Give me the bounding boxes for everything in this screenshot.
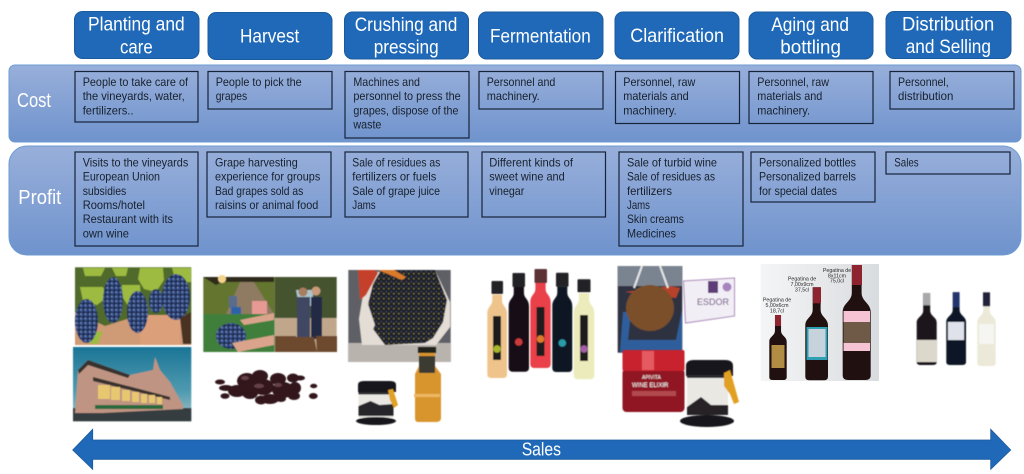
cost text: aging: materials and [757, 89, 822, 103]
heading: planting and care [74, 12, 199, 58]
profit text: planting [75, 152, 198, 246]
cost text: distribution [890, 72, 1014, 109]
profit text: harvest: experience for groups [215, 170, 320, 184]
profit text: distribution [886, 152, 1010, 174]
profit text: clarification: Sale of residues as [627, 170, 715, 184]
cost text: crushing: Machines and [353, 75, 420, 89]
photo: vinegar bottles [487, 269, 594, 379]
cost text: crushing: grapes, dispose of the [353, 103, 459, 117]
row label: cost: Cost [17, 90, 51, 112]
profit text: harvest: Grape harvesting [215, 155, 298, 169]
heading: distribution and selling [886, 12, 1011, 58]
heading: harvest: Harvest [240, 25, 300, 47]
profit text: harvest: Bad grapes sold as [215, 184, 303, 198]
photo: distribution wine bottles [917, 292, 996, 366]
profit text: harvest: raisins or animal food [215, 198, 318, 212]
bottle: dark blue vinegar [552, 273, 572, 372]
profit text: clarification: Sale of turbid wine [627, 155, 717, 169]
cost text: aging: Personnel, raw [757, 75, 829, 89]
cost text: fermentation: Personnel and [487, 75, 555, 89]
bottle: white wine [977, 292, 996, 366]
bottle: navy wine [946, 292, 966, 365]
product: Apivita wine elixir cream [622, 350, 684, 412]
profit text: fermentation: vinegar [489, 184, 524, 198]
cost text: aging: machinery. [757, 103, 810, 117]
heading: distribution and selling: Distribution [902, 14, 994, 36]
arrow label: sales: Sales [522, 439, 561, 460]
profit text: planting: Visits to the vineyards [83, 155, 188, 169]
profit text: crushing: Jams [352, 198, 376, 212]
cost text: fermentation: machinery. [487, 89, 540, 103]
panel: cost band [9, 65, 1021, 142]
panel: profit band [9, 146, 1021, 255]
cost text: aging [749, 72, 873, 124]
cost text: clarification: machinery. [623, 103, 677, 117]
bottle: white vinegar [574, 279, 594, 379]
cost text: crushing: personnel to press the [353, 89, 461, 103]
cost text: planting: the vineyards, water, [83, 89, 185, 103]
medium bottle with caption [788, 277, 828, 380]
heading: planting and care: Planting and [88, 14, 185, 36]
small bottle with caption: 5,00x6cm [766, 303, 789, 309]
profit text: clarification: fertilizers [627, 184, 672, 198]
profit text: planting: subsidies [83, 184, 126, 198]
small bottle with caption: 18,7cl [770, 308, 784, 314]
medium bottle with caption: Pegatina de [788, 277, 816, 283]
heading: crushing and pressing: pressing [374, 36, 439, 58]
cost text: harvest [208, 72, 332, 109]
photo: personalised label bottles [761, 264, 879, 381]
heading: crushing and pressing [344, 12, 468, 59]
profit text: clarification: Medicines [627, 226, 676, 240]
profit text: clarification: Skin creams [627, 212, 684, 226]
row label: profit: Profit [18, 187, 62, 209]
profit text: aging: for special dates [759, 184, 837, 198]
bottle: red vinegar [530, 269, 551, 368]
profit text: harvest [207, 152, 331, 217]
photo: harvest collage [203, 275, 337, 352]
heading: fermentation: Fermentation [490, 25, 591, 47]
cost text: distribution: Personnel, [898, 75, 949, 89]
photo: crushed grapes [348, 270, 451, 362]
small bottle with caption: Pegatina de [763, 298, 791, 304]
product: jam jar [680, 360, 739, 427]
cost text: harvest: grapes [216, 89, 247, 103]
heading: aging and bottling: Aging and [771, 14, 849, 36]
small bottle with caption [763, 298, 791, 380]
heading: planting and care: care [120, 36, 153, 58]
profit text: fermentation: sweet wine and [489, 170, 565, 184]
bottle: peach vinegar [487, 281, 507, 378]
heading: harvest [208, 12, 332, 60]
product box: Esdor [684, 278, 734, 323]
heading: aging and bottling: bottling [780, 36, 841, 58]
profit text: clarification [619, 152, 743, 246]
heading: distribution and selling: and Selling [906, 36, 991, 58]
cost text: distribution: distribution [898, 89, 953, 103]
profit text: fermentation [482, 152, 606, 217]
heading: crushing and pressing: Crushing and [355, 14, 457, 36]
photo: grape juice bottle [414, 347, 441, 422]
profit text: crushing: fertilizers or fuels [352, 170, 436, 184]
medium bottle with caption: 7,00x9cm [791, 282, 814, 288]
profit text: planting: European Union [83, 170, 160, 184]
profit text: fermentation: Different kinds of [489, 155, 574, 169]
profit text: distribution: Sales [894, 155, 919, 169]
heading: clarification: Clarification [630, 25, 724, 47]
profit text: crushing: Sale of grape juice [352, 184, 440, 198]
large bottle with caption: 75,0cl [830, 279, 844, 285]
profit text: planting: Rooms/hotel [83, 198, 145, 212]
photo: turbid wine press [618, 266, 682, 353]
cost text: clarification [616, 72, 740, 124]
heading: fermentation [478, 12, 603, 59]
profit text: aging: Personalized bottles [759, 155, 856, 169]
cost text: fermentation [479, 72, 603, 109]
bottle: dark red vinegar [509, 273, 529, 372]
bottle: dark red wine [917, 293, 937, 365]
heading: clarification [615, 12, 739, 59]
cost text: clarification: Personnel, raw [623, 75, 696, 89]
cost text: planting: fertilizers.. [83, 103, 134, 117]
cost text: harvest: People to pick the [216, 75, 302, 89]
medium bottle with caption: 37,5cl [795, 287, 809, 293]
profit text: planting: Restaurant with its [83, 212, 173, 226]
profit text: aging [751, 152, 875, 202]
cost text: planting [75, 72, 198, 122]
cost text: crushing [345, 72, 469, 138]
product: Apivita wine elixir cream: APIVITA [642, 375, 661, 381]
profit text: clarification: Jams [627, 198, 650, 212]
arrow: sales double-headed [73, 429, 1011, 469]
profit text: crushing: Sale of residues as [352, 155, 440, 169]
heading: aging and bottling [749, 12, 873, 59]
photo: raisins [215, 370, 318, 404]
photo: grape jam jar [356, 381, 398, 425]
large bottle with caption: 8x11cm [828, 273, 847, 279]
product: Apivita wine elixir cream: WINE ELIXIR [632, 383, 669, 389]
product box: Esdor: ESDOR [697, 297, 730, 307]
profit text: planting: own wine [83, 226, 129, 240]
photo: vineyard hotel building [73, 347, 191, 421]
large bottle with caption [823, 265, 871, 380]
cost text: crushing: waste [353, 118, 382, 132]
profit text: aging: Personalized barrels [759, 170, 856, 184]
cost text: planting: People to take care of [83, 75, 189, 89]
cost text: clarification: materials and [623, 89, 689, 103]
large bottle with caption: Pegatina de [823, 268, 851, 274]
profit text: crushing [345, 152, 468, 217]
photo: vineyard grapes [75, 267, 191, 345]
